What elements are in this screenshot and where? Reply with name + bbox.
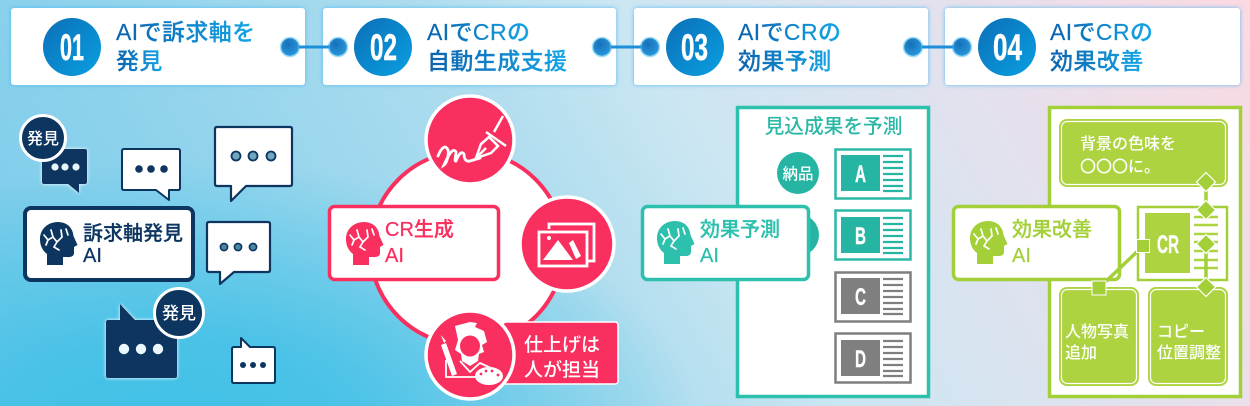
suggestion: copy position [1148,287,1228,386]
step 1 connector dot [280,38,300,56]
AI box: CR generation [330,206,498,280]
suggestion: background colour: 背景の色味を [1080,134,1176,153]
step 3 number badge: 03 [681,27,708,68]
step 2 heading: 自動生成支援 [427,48,567,74]
improvement frame [1050,108,1240,396]
second badge behind AI box [777,214,819,256]
AI box: effect prediction: AI [700,245,719,267]
step 3 number badge [666,18,724,76]
step 1 heading: AIで訴求軸を [116,19,256,45]
step 3 right connector dot [904,38,922,56]
step 2 number badge [354,18,412,76]
step 1 number badge [43,18,101,76]
suggestion: add portrait [1059,287,1139,386]
step 2 heading [427,19,567,74]
AI box: effect prediction [642,206,808,280]
AI box: effect improvement: 効果改善 [1012,218,1092,241]
step 4 number badge [978,18,1036,76]
step 3 heading: 効果予測 [738,48,832,74]
step 1 heading [116,19,256,74]
AI box: CR generation: AI [385,245,404,267]
suggestion: background colour [1059,119,1228,187]
delivered badge [777,152,819,194]
CR card [1138,207,1227,280]
panel: step 3 effect prediction [642,108,928,396]
card A: A [855,161,866,188]
panel: step 4 effect improvement [954,108,1240,396]
white bubble, top right [215,127,292,201]
card C: C [855,284,866,311]
AI box: effect improvement: AI [1012,245,1031,267]
card D [836,334,910,382]
frame title: 見込成果を予測 [765,116,902,138]
suggestion: background colour: 〇〇〇に。 [1080,158,1160,176]
dark bubble with badge, top left [20,116,87,193]
card D: D [855,346,866,373]
finishing label: 仕上げは [524,334,600,356]
AI box: effect improvement [954,206,1120,280]
step 2 header panel [323,8,616,85]
card C [836,272,910,322]
AI box: appeal axis discovery [25,208,193,280]
connector: portrait to CR [1092,240,1150,295]
step 3 heading: AIでCRの [738,19,841,45]
dark bubble with badge, bottom [106,288,204,378]
AI box: CR generation: CR生成 [385,218,454,241]
icon: painter [426,311,514,399]
white bubble, bottom right [232,338,275,383]
step 1 heading: 発見 [116,48,163,74]
step 1 header panel [11,8,305,85]
step 3 left connector dot [640,38,660,56]
card B: B [855,223,866,250]
icon: image stack [520,197,614,291]
step 2 heading: AIでCRの [427,19,530,45]
step 4 heading [1050,19,1153,74]
AI box: appeal axis discovery: 訴求軸発見 [83,222,183,245]
panel: step 1 discovery bubbles [20,116,292,383]
connector lines between steps [299,46,953,48]
finishing label [503,322,618,384]
white bubble, middle right [207,222,270,284]
step 4 heading: 効果改善 [1050,48,1144,74]
finishing label: 人が担当 [524,359,600,381]
step 4 header panel [945,8,1240,85]
CR card: CR [1157,231,1179,259]
step 4 connector dot [952,38,972,56]
large ring [370,151,564,345]
dark bubble with badge, top left: 発見 [27,130,59,148]
card B [836,210,910,260]
step 3 heading [738,19,841,74]
step 2 number badge: 02 [370,27,397,68]
suggestion: copy position: コピー [1157,323,1205,341]
white bubble, top centre [122,149,180,200]
suggestion: copy position: 位置調整 [1157,344,1221,362]
suggestion: add portrait: 追加 [1065,344,1097,362]
step 4 number badge: 04 [993,27,1022,68]
icon: pen signature [426,96,514,184]
delivered badge: 納品 [782,165,814,183]
suggestion: add portrait: 人物写真 [1065,323,1129,341]
AI box: effect prediction: 効果予測 [700,218,780,241]
step 2 left connector dot [328,38,348,56]
panel: step 2 CR generation [330,96,618,399]
step 1 number badge: 01 [60,27,84,68]
card A [836,150,910,198]
step 4 heading: AIでCRの [1050,19,1153,45]
prediction frame [738,108,928,396]
dark bubble with badge, bottom: 発見 [162,304,196,323]
AI box: appeal axis discovery: AI [83,245,102,267]
step 2 right connector dot [592,38,612,56]
step 3 header panel [634,8,928,85]
connector: copy to background [1196,172,1216,296]
